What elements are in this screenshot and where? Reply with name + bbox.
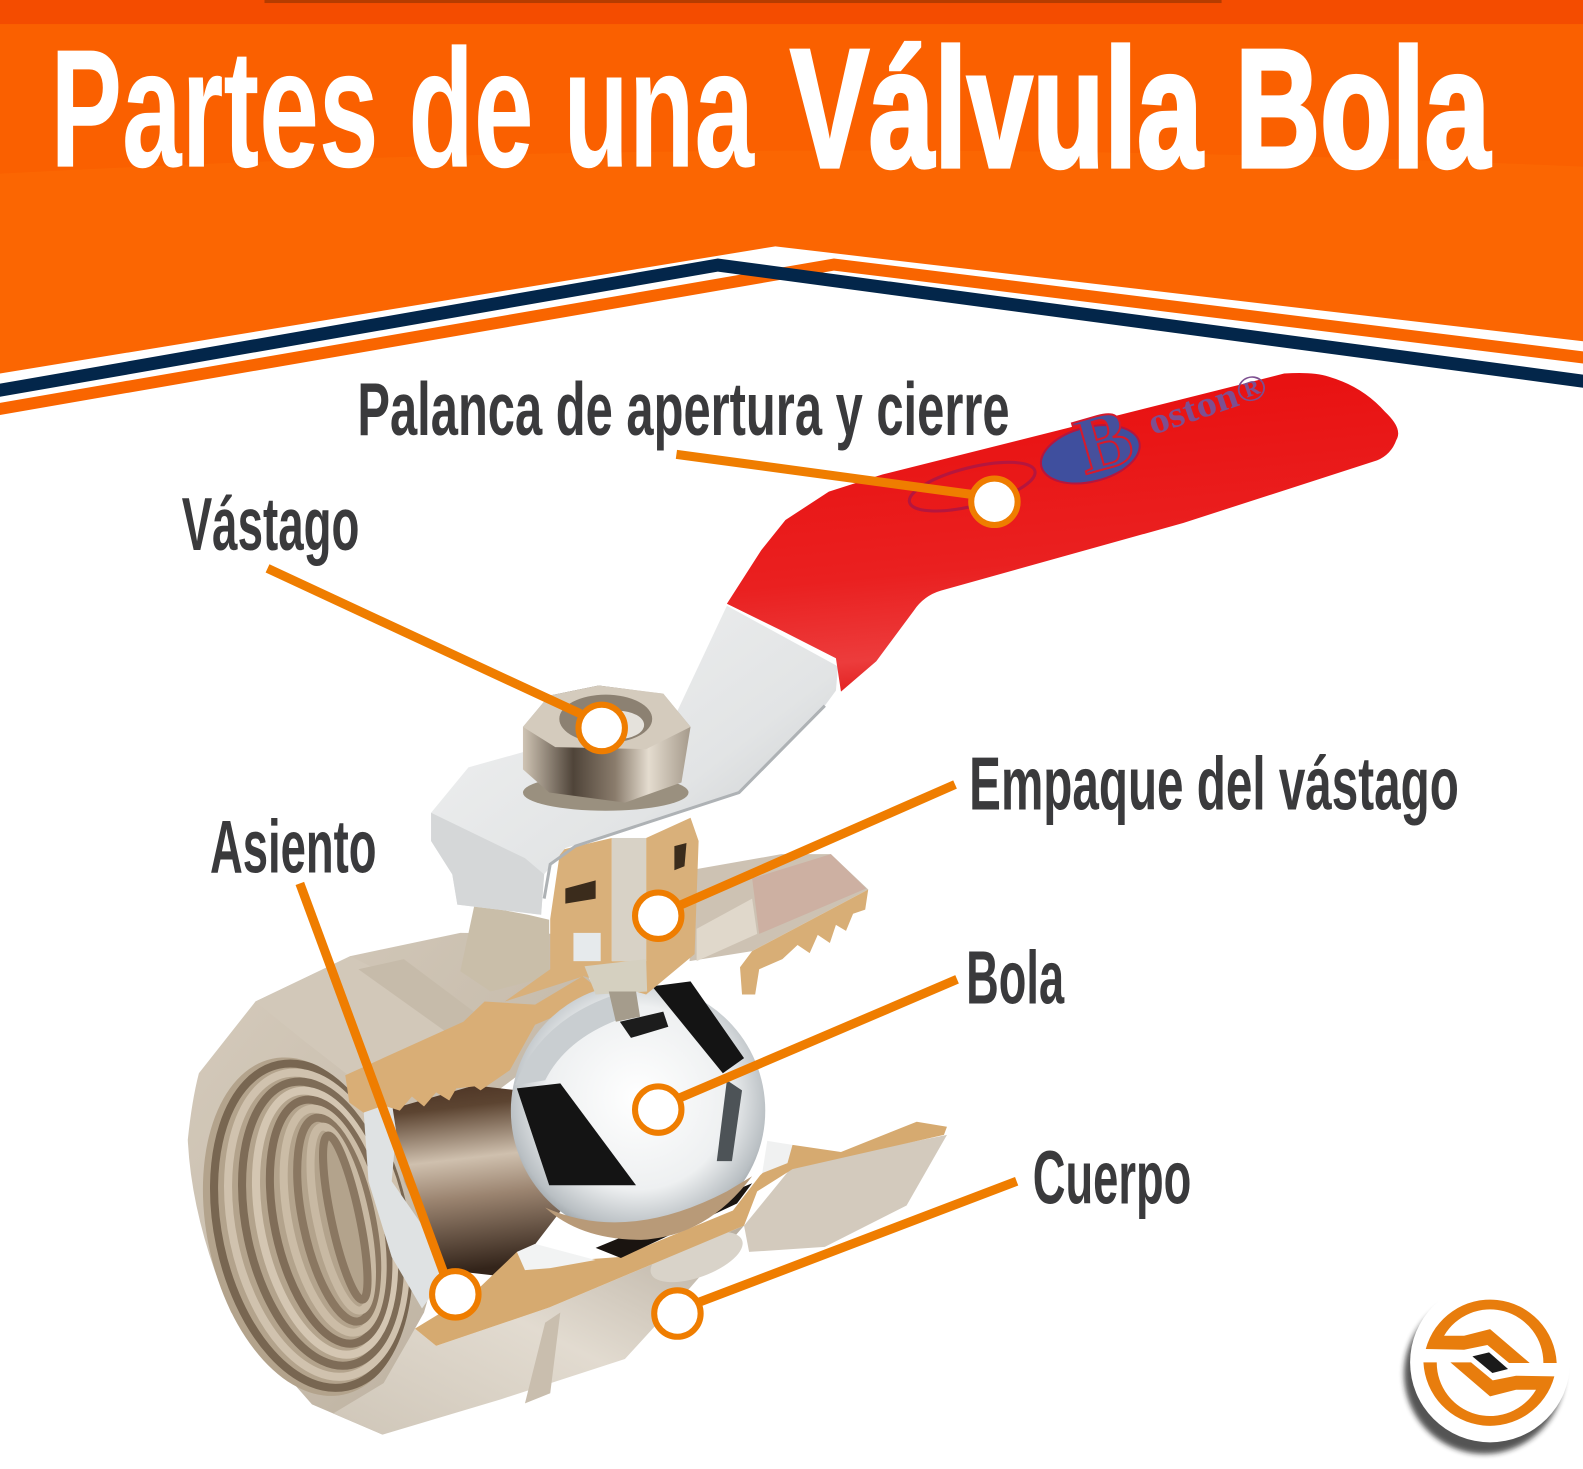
label: asiento bbox=[210, 804, 479, 1318]
seat crescent bbox=[363, 1100, 451, 1308]
stem boss bbox=[460, 905, 549, 991]
label: palanca: Palanca de apertura y cierre bbox=[357, 367, 1010, 451]
label: empaque del vastago bbox=[635, 742, 1459, 939]
label: bola: Bola bbox=[966, 936, 1065, 1020]
label: vastago: Vástago bbox=[182, 482, 359, 566]
handle logo bbox=[905, 365, 1272, 521]
chrome ball bbox=[511, 981, 765, 1240]
lower brass section bbox=[415, 1122, 947, 1346]
upper brass section bbox=[345, 976, 606, 1113]
label: cuerpo bbox=[654, 1135, 1191, 1337]
upper right body arm bbox=[690, 854, 868, 994]
handle logo: oston® bbox=[1143, 365, 1272, 443]
ball valve illustration bbox=[186, 365, 1398, 1435]
label: vastago bbox=[182, 482, 625, 751]
bore tube bbox=[393, 1085, 560, 1277]
navy chevron stripe bbox=[0, 258, 1583, 397]
red handle bbox=[727, 365, 1398, 692]
brass stem block bbox=[505, 818, 699, 1022]
label: asiento: Asiento bbox=[210, 804, 377, 888]
orange chevron stripe bbox=[0, 258, 1583, 415]
lever neck and plate bbox=[431, 606, 838, 915]
title: Partes de una bbox=[50, 14, 755, 203]
hex nut bbox=[523, 686, 691, 811]
label: palanca bbox=[357, 367, 1018, 525]
outer valve body bbox=[188, 933, 749, 1435]
label: cuerpo: Cuerpo bbox=[1033, 1135, 1191, 1219]
label: bola bbox=[635, 936, 1065, 1133]
handle logo: B bbox=[1066, 391, 1142, 492]
logo badge bbox=[1404, 1282, 1570, 1454]
lower right body arm bbox=[744, 1135, 947, 1252]
threaded opening bbox=[203, 1058, 412, 1396]
